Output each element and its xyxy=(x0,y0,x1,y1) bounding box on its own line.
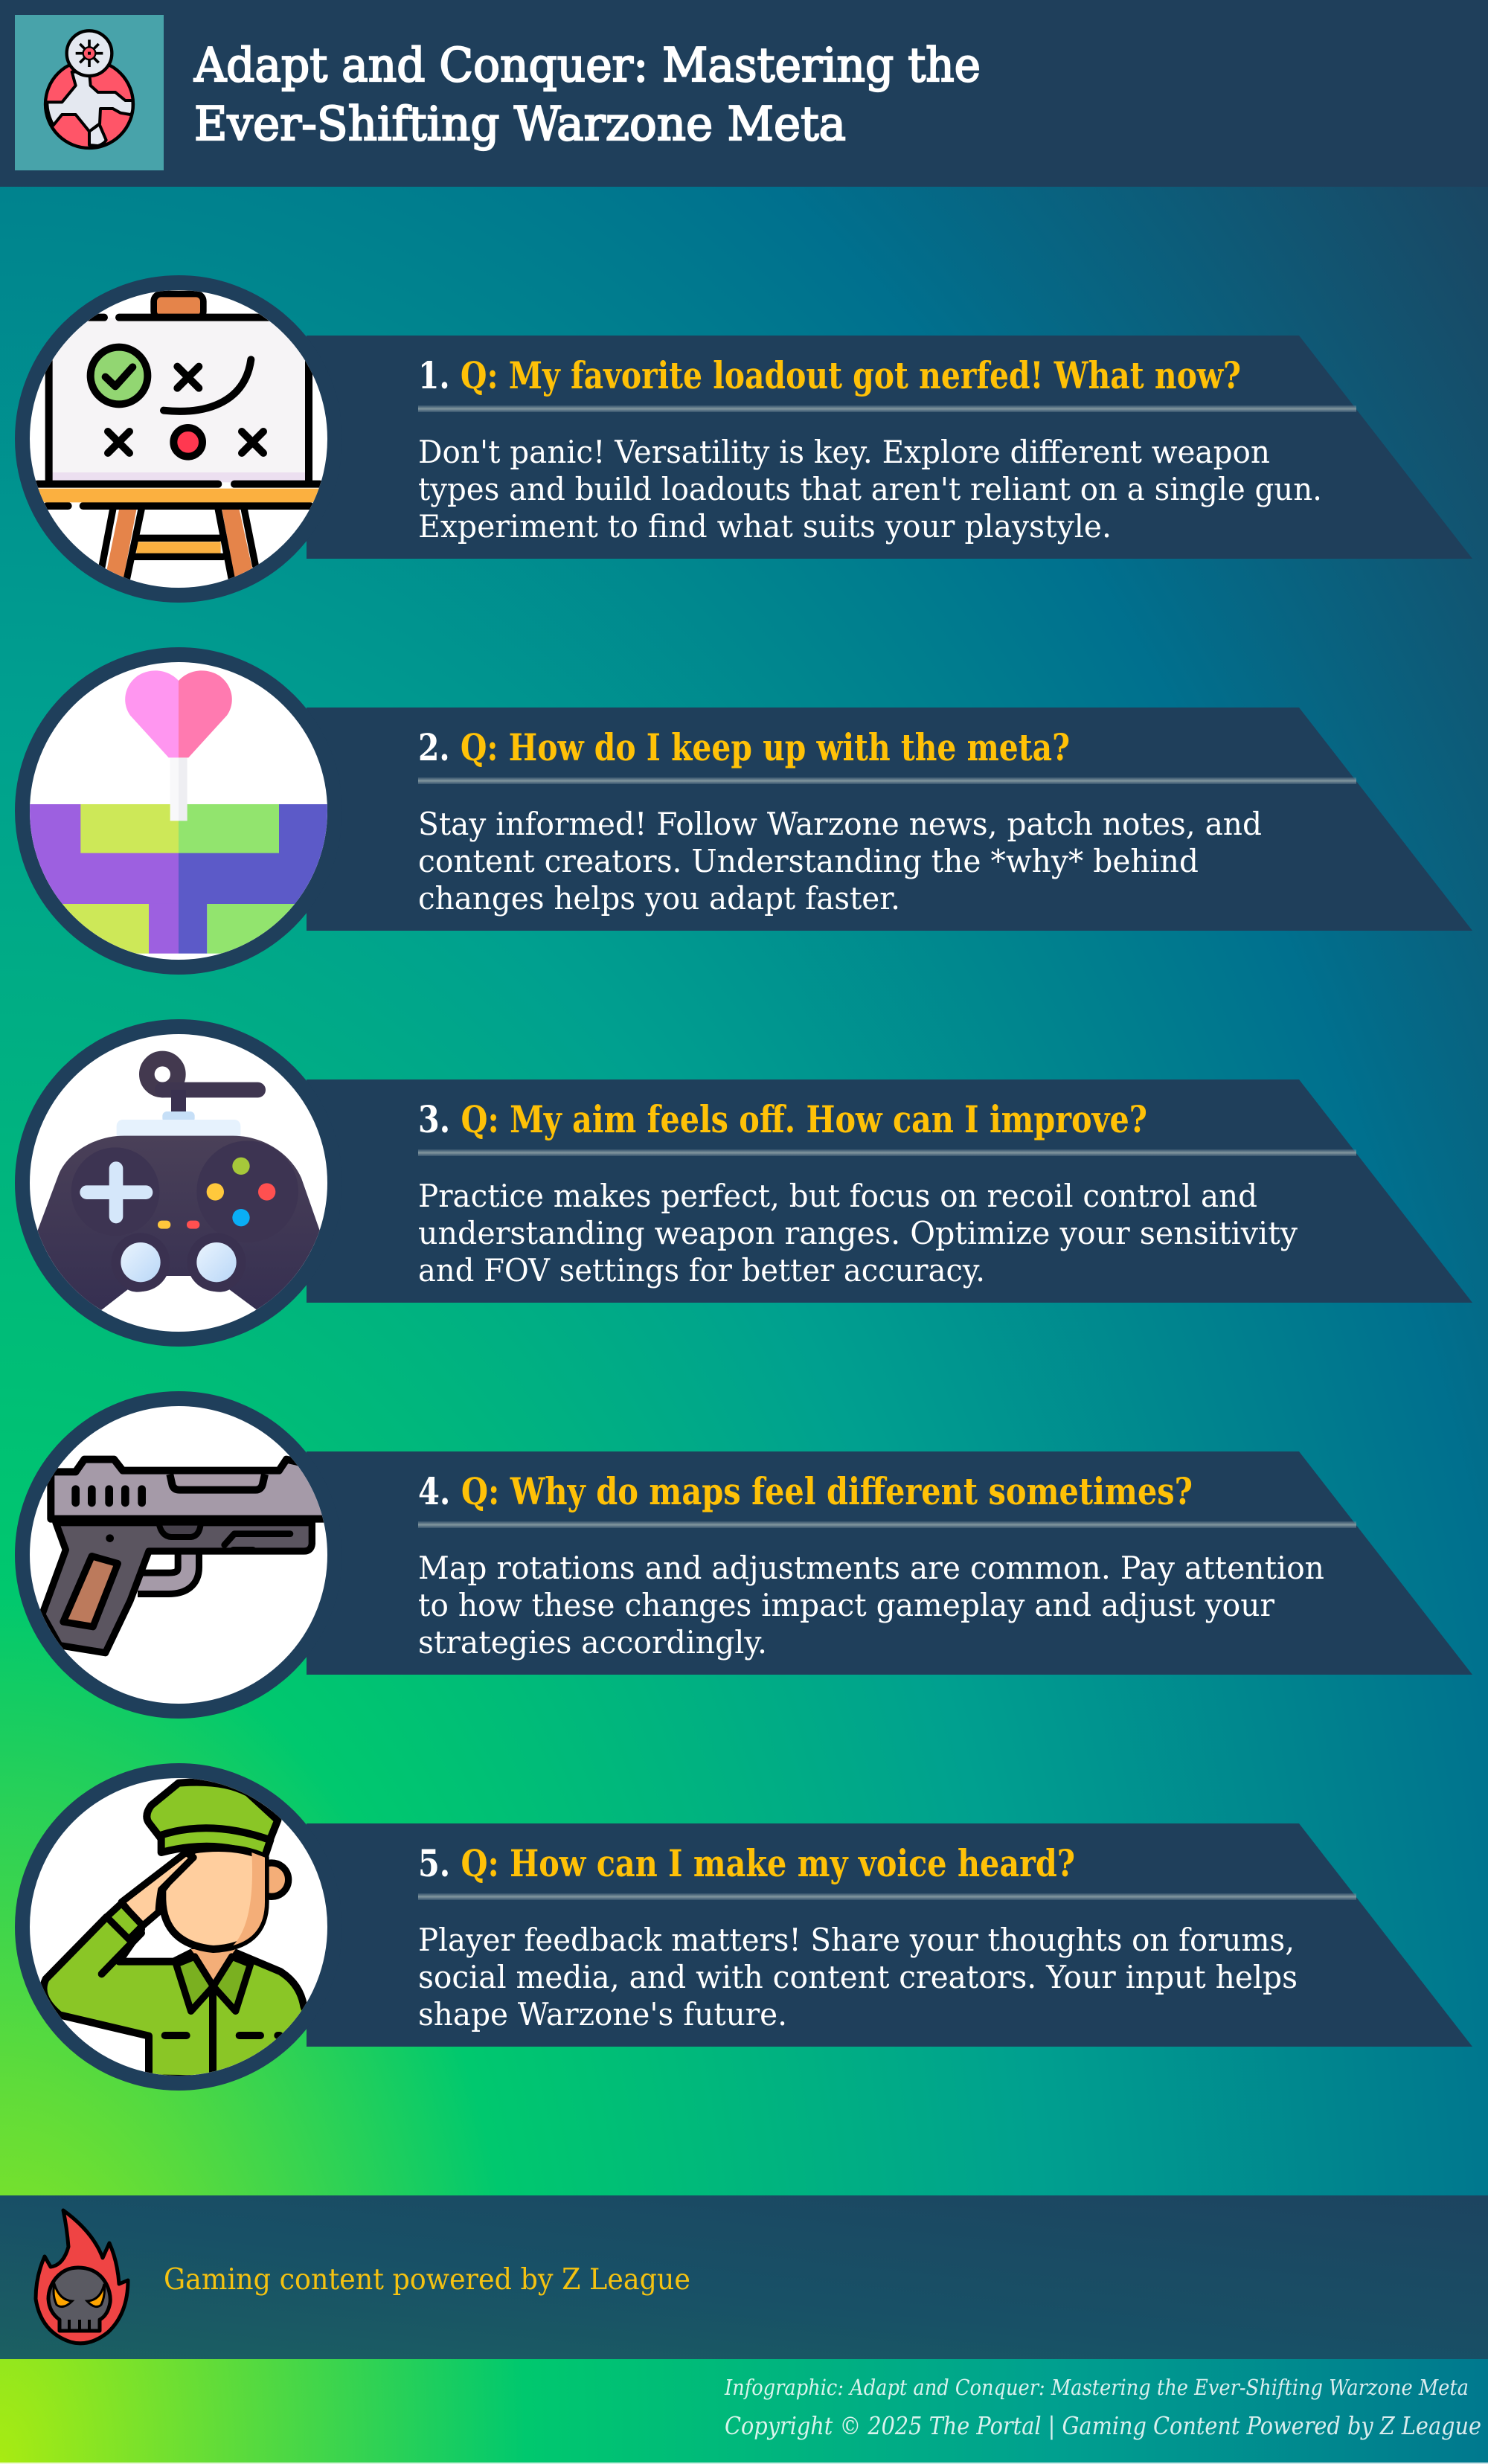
footer band xyxy=(0,2195,1488,2359)
panel: question 5 xyxy=(22,1771,1472,2083)
answer 3 text: Practice makes perfect, but focus on recoil control and xyxy=(418,1178,1257,1214)
circle icon: pistol xyxy=(22,1399,335,1711)
answer 1 text: Don't panic! Versatility is key. Explore different weapon xyxy=(418,434,1270,470)
answer 2 text: changes helps you adapt faster. xyxy=(418,880,900,917)
answer 3 text: understanding weapon ranges. Optimize your sensitivity xyxy=(418,1215,1298,1251)
copyright block xyxy=(724,2375,1481,2440)
answer 3 text: and FOV settings for better accuracy. xyxy=(418,1252,985,1289)
circle icon: map with heart pin xyxy=(22,655,335,967)
answer 2 text xyxy=(418,806,1262,917)
title xyxy=(193,38,981,151)
icon: flaming skull xyxy=(36,2210,128,2343)
panel: question 3 xyxy=(22,1027,1472,1339)
circle icon: saluting soldier xyxy=(22,1771,335,2083)
footer brand text: Gaming content powered by Z League xyxy=(164,2263,690,2297)
question 4 heading: 4. Q: Why do maps feel different sometimes? xyxy=(418,1469,1193,1513)
header band xyxy=(0,0,1488,187)
circle icon: game controller xyxy=(22,1027,335,1339)
banner 4 xyxy=(307,1451,1472,1675)
circle icon: strategy easel xyxy=(22,283,335,595)
answer 3 text xyxy=(418,1178,1298,1289)
answer 5 text xyxy=(418,1922,1298,2033)
answer 5 text: shape Warzone's future. xyxy=(418,1996,787,2033)
question 3 heading: 3. Q: My aim feels off. How can I improve? xyxy=(418,1097,1147,1141)
banner 3 xyxy=(307,1079,1472,1303)
answer 2 text: content creators. Understanding the *why* behind xyxy=(418,843,1199,879)
logo: cracked globe with virus xyxy=(15,15,164,170)
answer 2 text: Stay informed! Follow Warzone news, patch notes, and xyxy=(418,806,1262,842)
answer 4 text: strategies accordingly. xyxy=(418,1624,767,1661)
answer 5 text: Player feedback matters! Share your thoughts on forums, xyxy=(418,1922,1295,1958)
banner 1 xyxy=(307,336,1472,559)
banner 5 xyxy=(307,1823,1472,2047)
panel: question 4 xyxy=(22,1399,1472,1711)
answer 1 text: Experiment to find what suits your playstyle. xyxy=(418,508,1112,545)
question 5 heading: 5. Q: How can I make my voice heard? xyxy=(418,1841,1075,1885)
panel: question 2 xyxy=(22,655,1472,967)
answer 1 text: types and build loadouts that aren't reliant on a single gun. xyxy=(418,471,1322,507)
answer 4 text: to how these changes impact gameplay and adjust your xyxy=(418,1587,1275,1623)
title: Adapt and Conquer: Mastering the xyxy=(193,38,981,92)
question 2 heading: 2. Q: How do I keep up with the meta? xyxy=(418,725,1070,769)
answer 4 text: Map rotations and adjustments are common. Pay attention xyxy=(418,1550,1324,1586)
question 1 heading: 1. Q: My favorite loadout got nerfed! What now? xyxy=(418,353,1241,397)
answer 4 text xyxy=(418,1550,1324,1661)
answer 1 text xyxy=(418,434,1322,545)
banner 2 xyxy=(307,708,1472,931)
answer 5 text: social media, and with content creators. Your input helps xyxy=(418,1959,1298,1995)
title: Ever-Shifting Warzone Meta xyxy=(194,97,846,151)
panel: question 1 xyxy=(22,283,1472,595)
